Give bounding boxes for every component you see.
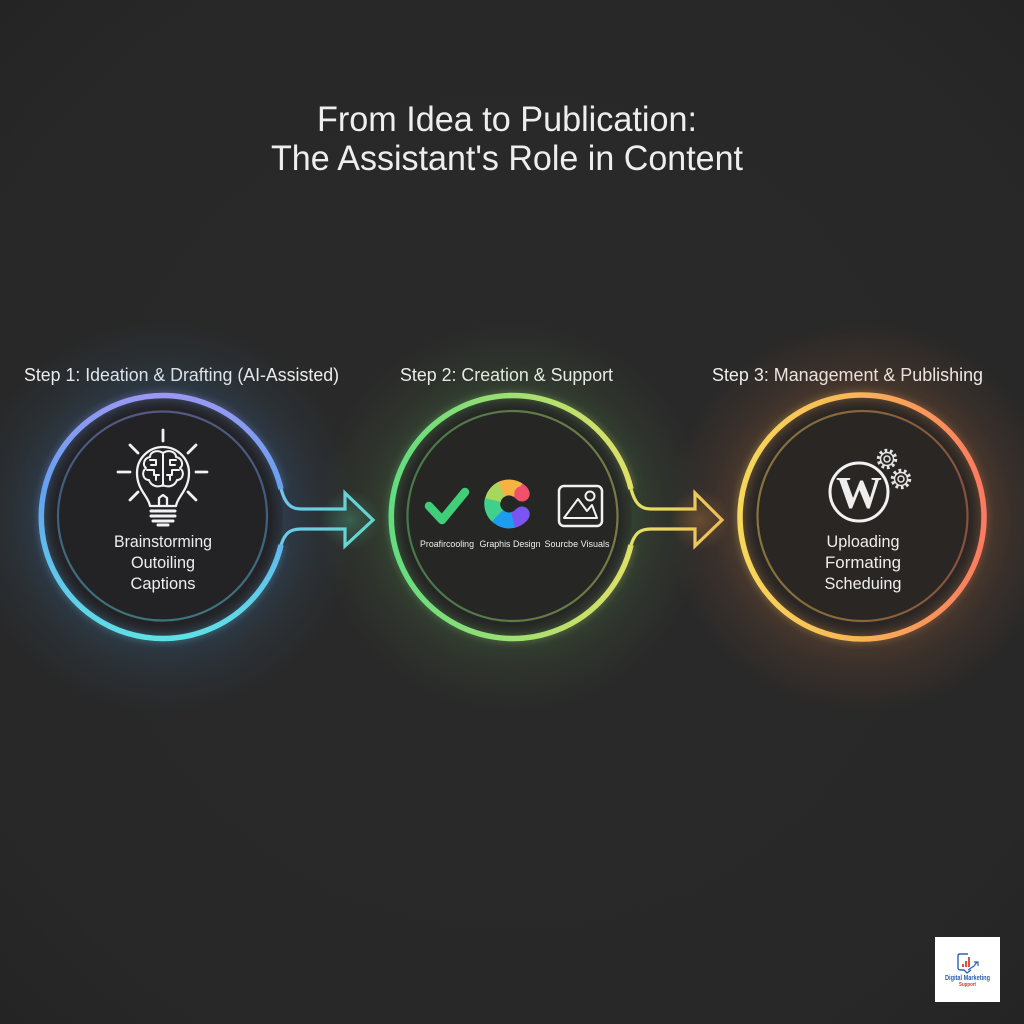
- text: step 1 tasks: Outoiling: [131, 554, 195, 572]
- ring and arrow: [41, 395, 373, 638]
- rings: [740, 395, 984, 639]
- title: [271, 99, 743, 178]
- text: step 1 tasks: Captions: [130, 575, 196, 593]
- icon: gears: [878, 450, 910, 488]
- icon: check mark: [429, 492, 465, 520]
- text: step 2 tasks: Graphis Design: [480, 539, 540, 550]
- text: step 2 tasks: Proafircooling: [420, 539, 474, 550]
- logo text: Digital Marketing: [945, 975, 990, 982]
- ring and arrow: [391, 395, 722, 638]
- text: step 3 tasks: [824, 533, 902, 593]
- icon: WordPress W: [830, 463, 888, 521]
- panel: step 2: [317, 322, 730, 712]
- icon: image frame: [559, 486, 602, 526]
- title: The Assistant's Role in Content: [271, 138, 743, 178]
- logo text: [945, 975, 990, 988]
- logo text: Support: [959, 982, 976, 988]
- text: step 3 tasks: Scheduing: [824, 575, 902, 593]
- text: step 2 tasks: Sourcbe Visuals: [544, 539, 610, 550]
- text: step 1 tasks: Brainstorming: [114, 533, 212, 551]
- step heading 2: Step 2: Creation & Support: [400, 365, 613, 385]
- logo icon: chart speech bubble: [958, 954, 978, 973]
- icon: multicolour C logo: [492, 486, 530, 522]
- icon: WordPress W: W: [836, 467, 882, 518]
- icon: light bulb with brain: [118, 430, 207, 525]
- panel: step 3: [667, 322, 1024, 712]
- text: step 1 tasks: [114, 533, 212, 593]
- logo badge: [935, 937, 1000, 1002]
- text: step 3 tasks: Uploading: [826, 533, 900, 551]
- text: step 3 tasks: Formating: [825, 554, 901, 572]
- panel: step 1: [0, 322, 380, 712]
- title: From Idea to Publication:: [317, 99, 697, 139]
- step heading 3: Step 3: Management & Publishing: [712, 365, 983, 385]
- text: step 2 tasks: [420, 539, 610, 550]
- step heading 1: Step 1: Ideation & Drafting (AI-Assisted): [24, 365, 339, 385]
